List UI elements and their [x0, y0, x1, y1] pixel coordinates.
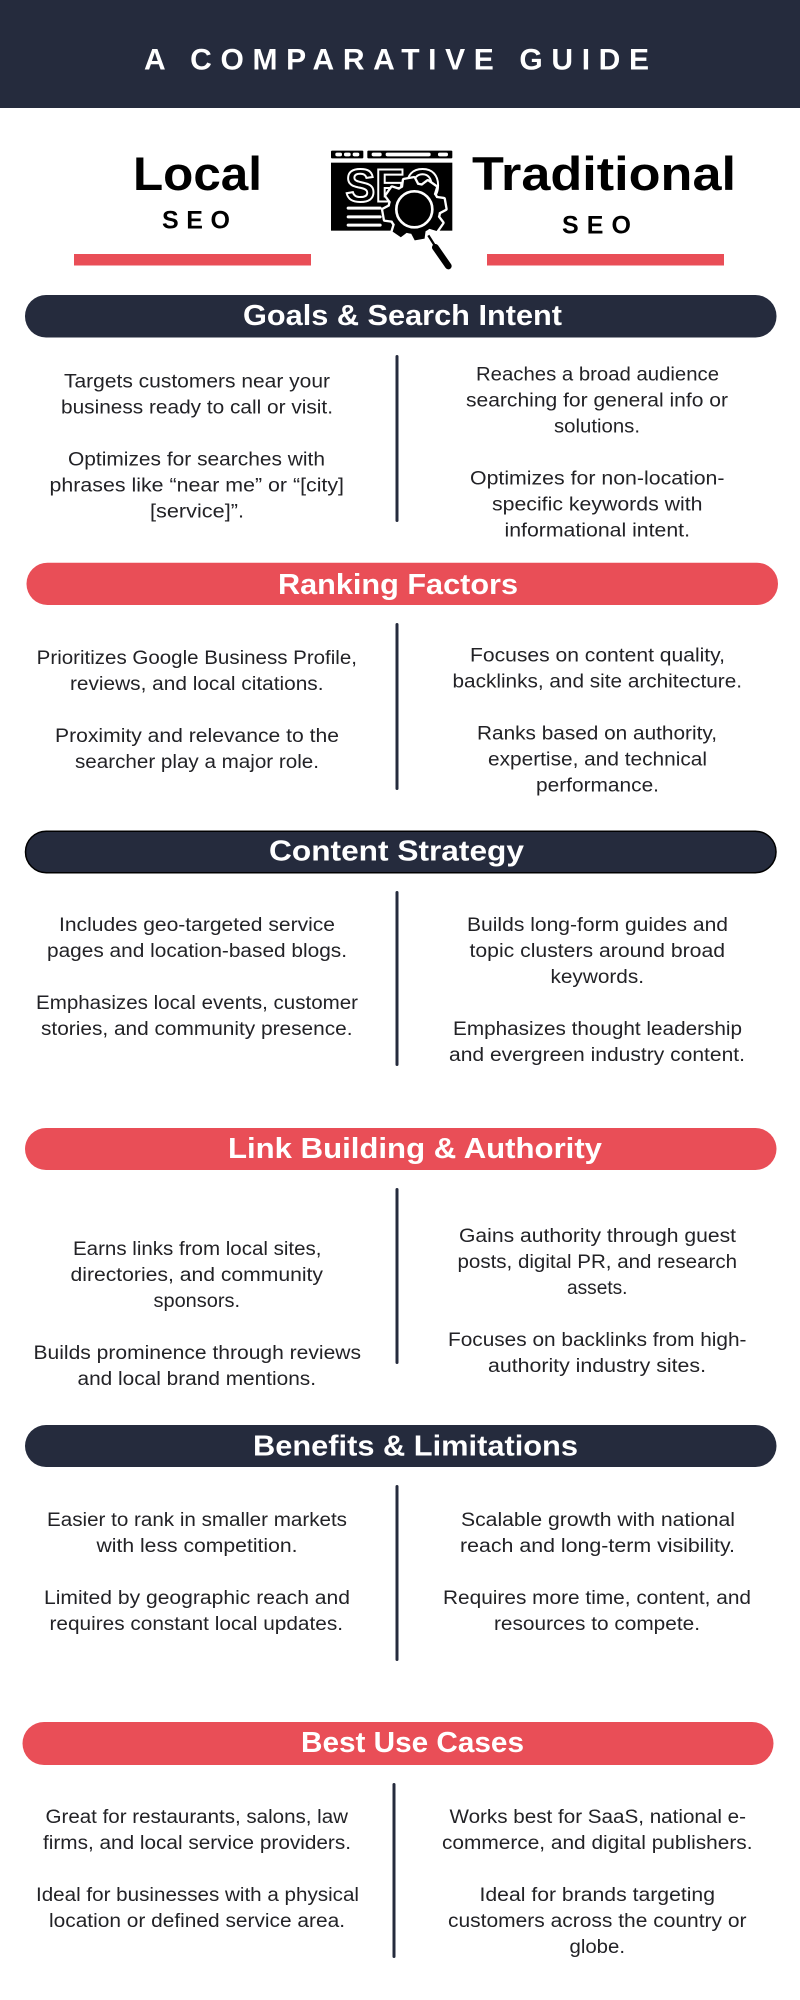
- heading: Best Use Cases: [22, 1722, 774, 1765]
- text: local goals: Optimizes for searches with: [68, 449, 325, 470]
- text: traditional content strategy: [449, 915, 745, 1066]
- heading: Link Building & Authority: [25, 1128, 776, 1170]
- text: traditional link building: posts, digital PR, and research: [458, 1252, 737, 1273]
- text: traditional ranking factors: backlinks, and site architecture.: [452, 671, 742, 692]
- text: local ranking factors: Proximity and relevance to the: [55, 726, 339, 747]
- text: traditional goals: Optimizes for non-location-: [470, 468, 724, 489]
- text: local benefits: [44, 1510, 350, 1635]
- text: traditional use cases: globe.: [570, 1937, 625, 1958]
- text: traditional link building: [448, 1226, 746, 1377]
- heading: Best Use Cases: Best Use Cases: [301, 1727, 524, 1759]
- text: local ranking factors: searcher play a major role.: [75, 752, 319, 773]
- text: traditional link building: Focuses on backlinks from high-: [448, 1330, 746, 1351]
- text: local benefits: Limited by geographic reach and: [44, 1588, 350, 1609]
- text: traditional link building: authority industry sites.: [488, 1356, 706, 1377]
- column heading: Traditional SEO: SEO: [562, 211, 631, 239]
- text: traditional ranking factors: [452, 645, 742, 796]
- text: local goals: business ready to call or visit.: [61, 398, 333, 419]
- heading: Benefits & Limitations: [25, 1425, 776, 1467]
- column heading: Local SEO: [74, 147, 311, 266]
- heading: Ranking Factors: [26, 563, 778, 605]
- text: local goals: phrases like “near me” or “[city]: [50, 475, 344, 496]
- text: local benefits: with less competition.: [95, 1536, 298, 1557]
- text: local use cases: Ideal for businesses with a physical: [36, 1885, 359, 1906]
- text: local use cases: Great for restaurants, salons, law: [46, 1807, 348, 1828]
- text: local content strategy: Emphasizes local events, customer: [36, 993, 359, 1014]
- text: local content strategy: [36, 915, 359, 1040]
- text: traditional benefits: resources to compete.: [494, 1614, 700, 1635]
- text: traditional use cases: Ideal for brands targeting: [480, 1885, 715, 1906]
- text: traditional benefits: reach and long-term visibility.: [460, 1536, 735, 1557]
- text: local ranking factors: reviews, and local citations.: [70, 674, 324, 695]
- text: traditional goals: Reaches a broad audience: [476, 364, 719, 385]
- text: traditional use cases: [442, 1807, 752, 1958]
- text: local use cases: firms, and local service providers.: [43, 1833, 351, 1854]
- text: traditional content strategy: and evergreen industry content.: [449, 1045, 745, 1066]
- panel: Goals & Search Intent: [25, 295, 776, 541]
- text: local goals: [50, 372, 344, 522]
- text: traditional goals: solutions.: [554, 416, 640, 437]
- icon: SEO browser window with gear and magnifier: [331, 151, 452, 266]
- text: local content strategy: Includes geo-targeted service: [59, 915, 335, 936]
- text: traditional goals: [466, 364, 729, 541]
- panel: Link Building & Authority: [25, 1128, 776, 1390]
- text: local goals: [service]”.: [150, 501, 244, 522]
- text: local content strategy: pages and location-based blogs.: [47, 941, 347, 962]
- text: traditional goals: searching for general info or: [466, 390, 729, 411]
- text: traditional ranking factors: Ranks based on authority,: [477, 723, 717, 744]
- text: traditional content strategy: Builds long-form guides and: [467, 915, 728, 936]
- text: traditional use cases: Works best for SaaS, national e-: [450, 1807, 746, 1828]
- text: local link building: directories, and community: [70, 1265, 324, 1286]
- text: traditional use cases: commerce, and digital publishers.: [442, 1833, 752, 1854]
- text: traditional use cases: customers across the country or: [448, 1911, 747, 1932]
- panel: Ranking Factors: [26, 563, 778, 796]
- text: local link building: and local brand mentions.: [78, 1369, 316, 1390]
- heading: Ranking Factors: Ranking Factors: [278, 569, 518, 601]
- panel: Benefits & Limitations: [25, 1425, 776, 1661]
- text: local use cases: location or defined service area.: [49, 1911, 345, 1932]
- heading: Link Building & Authority: Link Building & Authority: [228, 1133, 602, 1165]
- text: local link building: [34, 1239, 361, 1390]
- column heading: Local SEO: Local: [133, 147, 262, 200]
- heading: Benefits & Limitations: Benefits & Limitations: [253, 1431, 578, 1463]
- text: local benefits: Easier to rank in smaller markets: [47, 1510, 347, 1531]
- text: local ranking factors: Prioritizes Google Business Profile,: [37, 648, 357, 669]
- heading: Content Strategy: Content Strategy: [269, 836, 524, 868]
- panel: Best Use Cases: [22, 1722, 774, 1958]
- text: traditional goals: specific keywords with: [492, 494, 702, 515]
- column heading: Traditional SEO: [472, 147, 736, 266]
- title banner: [0, 0, 800, 108]
- text: local content strategy: stories, and community presence.: [41, 1019, 352, 1040]
- heading: Goals & Search Intent: [25, 295, 776, 338]
- text: traditional content strategy: Emphasizes thought leadership: [453, 1019, 742, 1040]
- text: local benefits: requires constant local updates.: [50, 1614, 343, 1635]
- text: traditional ranking factors: Focuses on content quality,: [470, 645, 725, 666]
- text: local link building: Earns links from local sites,: [73, 1239, 322, 1260]
- text: traditional benefits: Scalable growth with national: [461, 1510, 735, 1531]
- panel: Content Strategy: [26, 831, 776, 1066]
- column heading: Traditional SEO: Traditional: [472, 147, 736, 200]
- text: traditional ranking factors: performance.: [536, 775, 659, 796]
- heading: Content Strategy: [26, 831, 776, 873]
- text: traditional benefits: [443, 1510, 751, 1635]
- text: traditional benefits: Requires more time, content, and: [443, 1588, 751, 1609]
- text: traditional ranking factors: expertise, and technical: [488, 749, 707, 770]
- text: traditional content strategy: topic clusters around broad: [470, 941, 725, 962]
- title banner: A COMPARATIVE GUIDE: [144, 44, 649, 76]
- text: traditional link building: assets.: [567, 1278, 628, 1299]
- text: traditional content strategy: keywords.: [550, 967, 644, 988]
- text: local use cases: [36, 1807, 359, 1932]
- text: traditional goals: informational intent.: [504, 520, 690, 541]
- icon: SEO browser window with gear and magnifier: SEO: [345, 159, 440, 211]
- column heading: Local SEO: SEO: [162, 207, 230, 235]
- text: local link building: Builds prominence through reviews: [34, 1343, 361, 1364]
- text: traditional link building: Gains authority through guest: [459, 1226, 737, 1247]
- text: local link building: sponsors.: [154, 1291, 240, 1312]
- heading: Goals & Search Intent: Goals & Search Intent: [243, 300, 562, 332]
- text: local ranking factors: [37, 648, 357, 773]
- text: local goals: Targets customers near your: [64, 372, 331, 393]
